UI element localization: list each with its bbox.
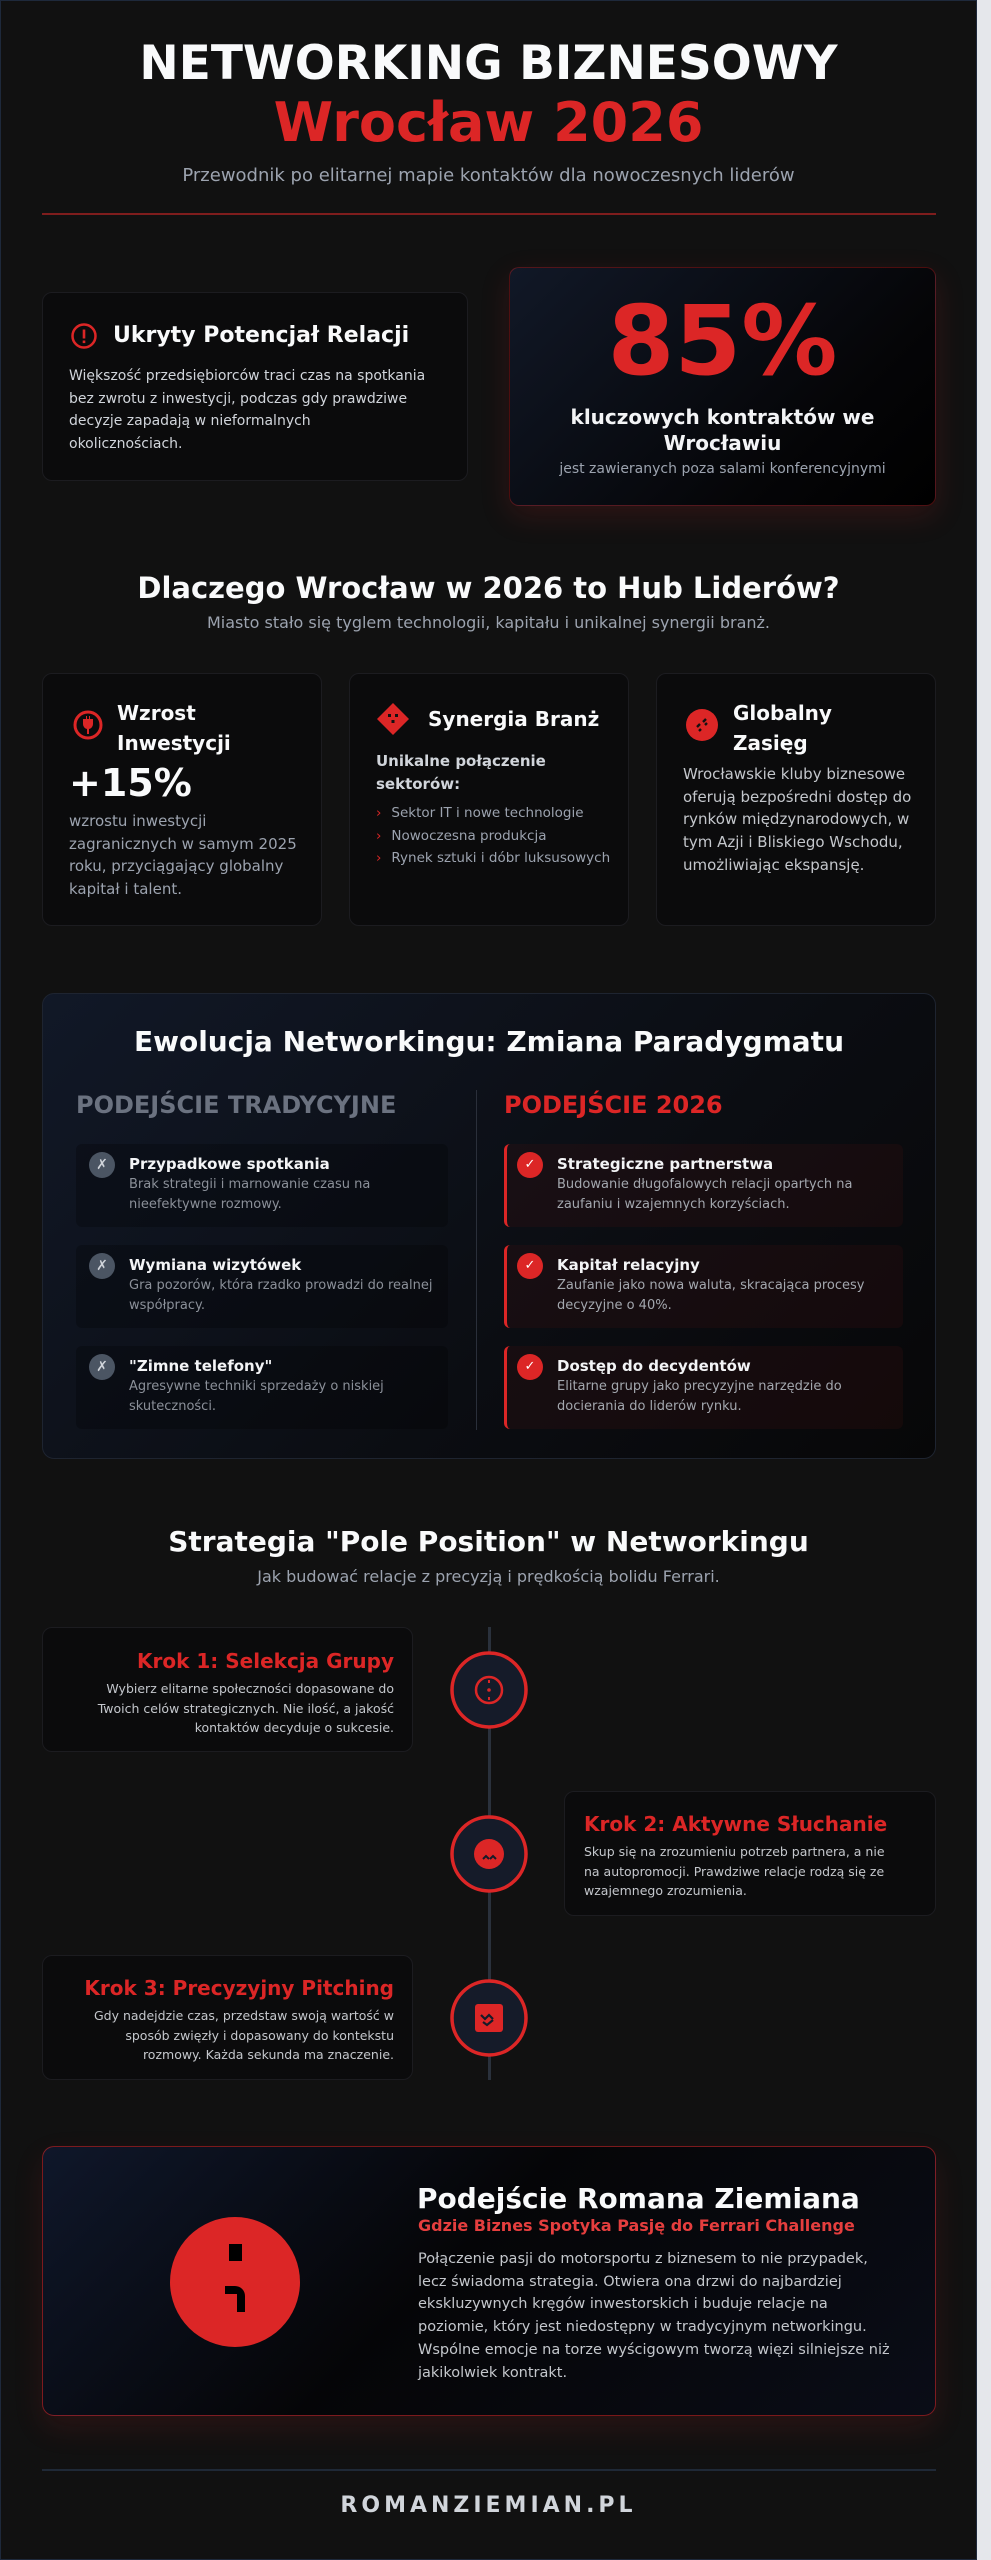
item: business cards: ✗ (96, 1258, 108, 1274)
heading: Synergia Branż (428, 707, 599, 731)
icon: plug (74, 710, 102, 740)
text: bez zwrotu z inwestycji, podczas gdy prawdziwe (69, 390, 407, 406)
text: wzrostu inwestycji zagranicznych w samym 2025 roku, przyciągający globalny kapitał i talent. (69, 812, 297, 898)
big number: 85% (608, 285, 837, 397)
text: Wrocławskie kluby biznesowe oferują bezpośredni dostęp do rynków międzynarodowych, w tym Azji i Bliskiego Wschodu, umożliwiając ekspansję. (683, 765, 911, 874)
heading: Podejście Romana Ziemiana (417, 2182, 860, 2215)
text (69, 368, 425, 452)
item: business cards: Gra pozorów, która rzadko prowadzi do realnej współpracy. (129, 1278, 432, 1313)
item: cold calls: Agresywne techniki sprzedaży o niskiej skuteczności. (129, 1379, 384, 1414)
item: business cards (76, 1245, 448, 1328)
list: 2026 (504, 1144, 903, 1429)
item: strategic partnerships: ✓ (525, 1157, 535, 1172)
heading: why Wroclaw: Dlaczego Wrocław w 2026 to Hub Liderów? (137, 571, 840, 605)
step 1 card: Wybierz elitarne społeczności dopasowane do Twoich celów strategicznych. Nie ilość, a jakość kontaktów decyduje o sukcesie. (98, 1681, 394, 1735)
step 3 card (42, 1955, 413, 2080)
item: decision makers (504, 1346, 903, 1429)
column heading: traditional: PODEJŚCIE TRADYCYJNE (76, 1091, 396, 1119)
step 2 card: Krok 2: Aktywne Słuchanie (584, 1812, 887, 1836)
icon: diamond (377, 703, 409, 735)
heading: Inwestycji (117, 731, 231, 755)
heading (733, 701, 832, 755)
item: relational capital: Zaufanie jako nowa waluta, skracająca procesy decyzyjne o 40%. (557, 1278, 864, 1313)
panel: 85% stat (509, 267, 936, 506)
text: Unikalne połączenie sektorów: (376, 752, 546, 793)
subtitle: Przewodnik po elitarnej mapie kontaktów dla nowoczesnych liderów (182, 165, 795, 186)
subheading: Gdzie Biznes Spotyka Pasję do Ferrari Challenge (418, 2216, 855, 2235)
item: random meetings: Przypadkowe spotkania (129, 1155, 330, 1173)
timeline (42, 1627, 936, 2080)
list (376, 805, 610, 866)
panel: industry synergy (349, 673, 629, 926)
text: okolicznościach. (69, 436, 182, 452)
heading: Wzrost (117, 701, 196, 725)
item: cold calls: ✗ (96, 1359, 108, 1375)
title: NETWORKING BIZNESOWY (139, 36, 838, 91)
panel: hidden potential (42, 292, 468, 481)
panel: investment growth (42, 673, 322, 926)
panel: global reach (656, 673, 936, 926)
icon: globe (686, 709, 718, 741)
list: › Sektor IT i nowe technologie (376, 805, 584, 821)
title: Wrocław 2026 (274, 91, 703, 154)
list: › Rynek sztuki i dóbr luksusowych (376, 850, 610, 866)
item: cold calls (76, 1346, 448, 1429)
subtitle: Miasto stało się tyglem technologii, kapitału i unikalnej synergii branż. (207, 613, 770, 632)
item: business cards: Wymiana wizytówek (129, 1256, 301, 1274)
heading: Zasięg (733, 731, 808, 755)
heading: Ukryty Potencjał Relacji (113, 323, 409, 348)
panel: Roman Ziemian (42, 2146, 936, 2416)
item: random meetings (76, 1144, 448, 1227)
text: Większość przedsiębiorców traci czas na spotkania (69, 368, 425, 384)
item: decision makers: Dostęp do decydentów (557, 1357, 751, 1375)
icon: red emblem (170, 2217, 300, 2347)
step 1 card (42, 1627, 413, 1752)
item: relational capital: ✓ (525, 1258, 535, 1273)
icon: warning (71, 323, 97, 349)
icon: step 2 ear (450, 1815, 528, 1893)
item: random meetings: Brak strategii i marnowanie czasu na nieefektywne rozmowy. (129, 1177, 370, 1212)
icon: step 3 chart (450, 1979, 528, 2057)
item: random meetings: ✗ (96, 1157, 108, 1173)
step 2 card: Skup się na zrozumieniu potrzeb partnera, a nie na autopromocji. Prawdziwe relacje rodzą się ze wzajemnego zrozumienia. (584, 1844, 885, 1898)
item: strategic partnerships: Budowanie długofalowych relacji opartych na zaufaniu i wzajemnych korzyściach. (557, 1177, 852, 1212)
footer: ROMANZIEMIAN.PL (340, 2493, 637, 2518)
heading: pole position: Strategia "Pole Position" w Networkingu (168, 1525, 809, 1558)
item: strategic partnerships (504, 1144, 903, 1227)
item: relational capital: Kapitał relacyjny (557, 1256, 700, 1274)
item: relational capital (504, 1245, 903, 1328)
text: decyzje zapadają w nieformalnych (69, 413, 311, 429)
heading: Globalny (733, 701, 832, 725)
list: traditional (76, 1144, 432, 1414)
step 2 card (564, 1791, 936, 1916)
item: strategic partnerships: Strategiczne partnerstwa (557, 1155, 773, 1173)
step 3 card: Gdy nadejdzie czas, przedstaw swoją wartość w sposób zwięzły i dopasowany do kontekstu rozmowy. Każda sekunda ma znaczenie. (94, 2008, 394, 2062)
column heading: 2026: PODEJŚCIE 2026 (504, 1091, 723, 1119)
item: decision makers: ✓ (525, 1359, 535, 1374)
stat label: kluczowych kontraktów we Wrocławiu (571, 405, 874, 455)
stat: +15% (69, 761, 192, 805)
step 1 card: Krok 1: Selekcja Grupy (137, 1649, 394, 1673)
text: Połączenie pasji do motorsportu z biznesem to nie przypadek, lecz świadoma strategia. Otwiera ona drzwi do najbardziej ekskluzywnych kręgów inwestorskich i buduje relacje na poziomie, który jest niedostępny w tradycyjnym networkingu. Wspólne emocje na torze wyścigowym tworzą więzi silniejsze niż jakikolwiek kontrakt. (418, 2251, 890, 2381)
heading (117, 701, 231, 755)
panel: evolution (42, 993, 936, 1459)
item: decision makers: Elitarne grupy jako precyzyjne narzędzie do docierania do liderów rynku. (557, 1379, 842, 1414)
subtitle: Jak budować relacje z precyzją i prędkością bolidu Ferrari. (257, 1567, 720, 1586)
icon: step 1 target (450, 1651, 528, 1729)
item: cold calls: "Zimne telefony" (129, 1357, 272, 1375)
title (139, 36, 838, 154)
heading: Ewolucja Networkingu: Zmiana Paradygmatu (134, 1025, 844, 1058)
step 3 card: Krok 3: Precyzyjny Pitching (84, 1976, 394, 2000)
list: › Nowoczesna produkcja (376, 828, 547, 844)
panel: 85% stat: jest zawieranych poza salami konferencyjnymi (559, 461, 886, 477)
